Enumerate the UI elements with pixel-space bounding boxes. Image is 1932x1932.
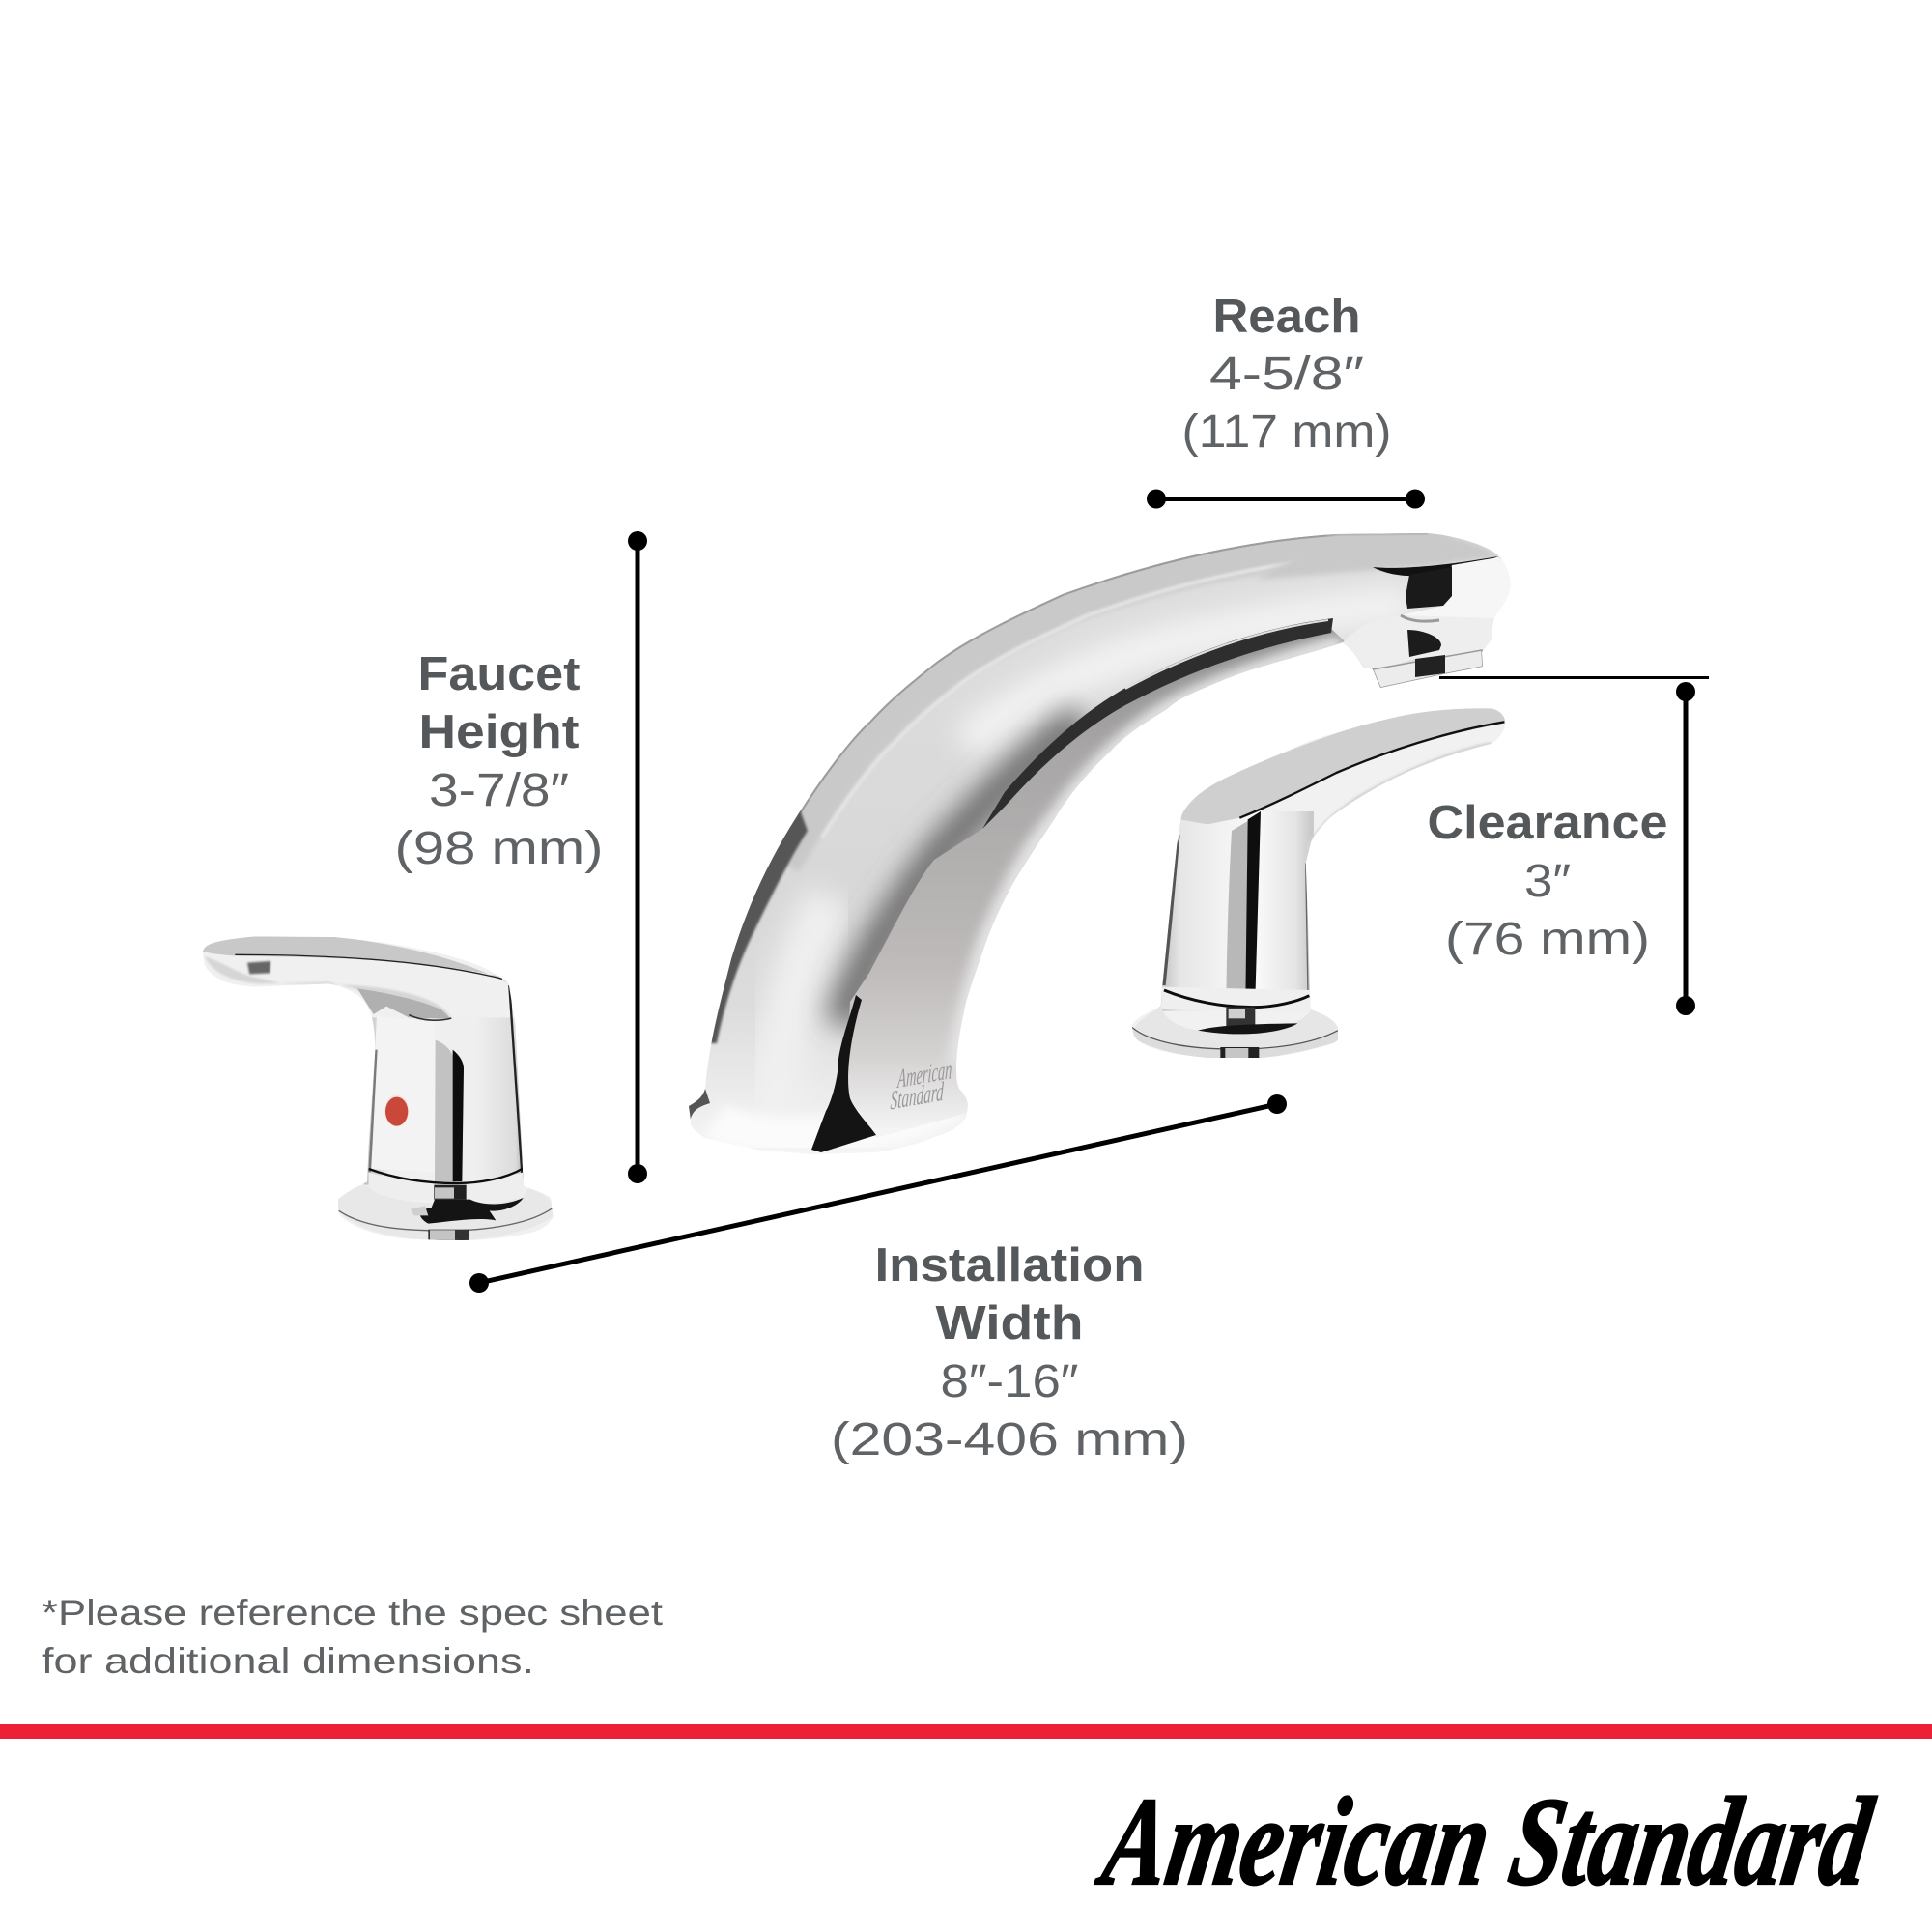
left handle — [203, 937, 553, 1240]
installation width label: Installation — [875, 1239, 1144, 1292]
inner gray band — [847, 626, 1372, 1138]
reach label: 4-5/8″ — [1209, 349, 1364, 400]
collar — [369, 1172, 524, 1185]
plate — [1133, 1007, 1338, 1048]
faucet height label: 3-7/8″ — [429, 765, 569, 816]
left edge reflection — [707, 810, 808, 1043]
faucet height label: Height — [419, 706, 580, 758]
faucet height dimension line — [628, 531, 647, 1183]
faucet height label: (98 mm) — [394, 823, 603, 874]
footnote: for additional dimensions. — [42, 1641, 534, 1681]
clearance dimension line — [1439, 678, 1709, 1015]
reach dimension line — [1147, 489, 1425, 508]
dark streak — [982, 618, 1333, 829]
right handle — [1132, 708, 1505, 1058]
main spout faucet — [689, 533, 1511, 1154]
clearance label: Clearance — [1428, 797, 1667, 849]
installation width label: 8″-16″ — [941, 1356, 1078, 1407]
clearance label — [1428, 797, 1667, 965]
plate — [335, 1185, 555, 1241]
small logo on spout: American — [896, 1055, 952, 1094]
black teardrop — [811, 995, 876, 1152]
faucet height label: Faucet — [417, 648, 580, 700]
footnote — [42, 1593, 664, 1681]
American Standard logo: American Standard — [1090, 1773, 1882, 1912]
installation width dimension line — [469, 1094, 1287, 1293]
red divider bar — [0, 1724, 1932, 1739]
faucet height label — [394, 648, 603, 874]
clearance label: (76 mm) — [1445, 914, 1650, 965]
small logo on spout: Standard — [890, 1077, 945, 1116]
spout head — [1256, 533, 1498, 580]
collar — [1161, 987, 1311, 1012]
reach label: (117 mm) — [1182, 407, 1391, 458]
red hot indicator — [384, 1094, 409, 1127]
small logo on spout — [890, 1055, 952, 1116]
installation width label: Width — [935, 1297, 1084, 1350]
installation width label: (203-406 mm) — [831, 1414, 1188, 1465]
installation width label — [831, 1239, 1188, 1465]
clearance label: 3″ — [1524, 856, 1571, 907]
reach label: Reach — [1213, 291, 1360, 343]
shadow beside inner band — [842, 720, 1082, 1024]
body — [371, 1017, 388, 1170]
reach label — [1182, 291, 1391, 458]
footnote: *Please reference the spec sheet — [42, 1593, 664, 1633]
